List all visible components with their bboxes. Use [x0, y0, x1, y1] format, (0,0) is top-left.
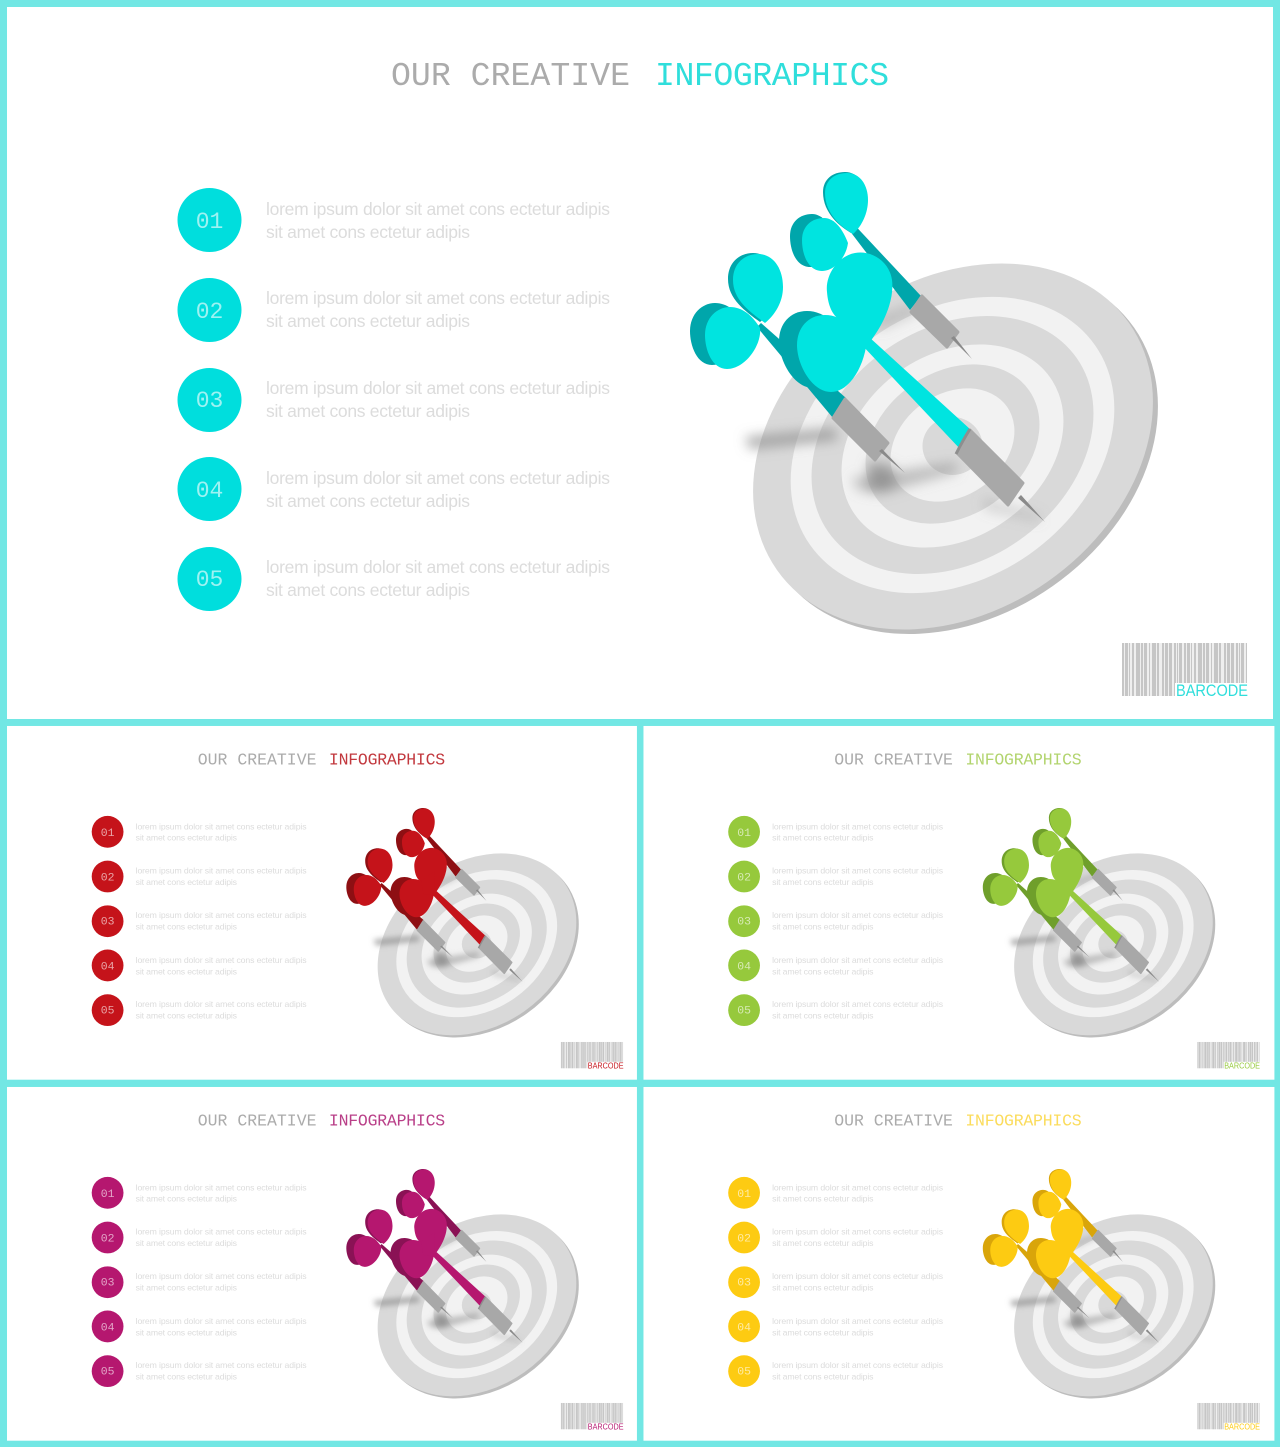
title: INFOGRAPHICS: [965, 751, 1082, 770]
illustration: dartboard with three darts: [979, 1169, 1250, 1436]
list item 05: [178, 547, 610, 611]
list item 02: sit amet cons ectetur adipis: [772, 1238, 874, 1248]
barcode: [561, 1403, 624, 1431]
title: OUR CREATIVE: [834, 1112, 953, 1131]
list item 04: sit amet cons ectetur adipis: [136, 1327, 238, 1337]
list item 04: lorem ipsum dolor sit amet cons ectetur adipis: [772, 1316, 944, 1326]
list item 01: lorem ipsum dolor sit amet cons ectetur adipis: [772, 1182, 944, 1192]
list item 05: sit amet cons ectetur adipis: [772, 1372, 874, 1382]
barcode: BARCODE: [1176, 681, 1248, 700]
dart: left: [690, 253, 905, 473]
list item 01: 01: [737, 1188, 751, 1201]
list item 01: [92, 1177, 307, 1209]
list item 02: lorem ipsum dolor sit amet cons ectetur adipis: [772, 866, 944, 876]
list item 02: 02: [101, 871, 115, 884]
list item 05: sit amet cons ectetur adipis: [772, 1011, 874, 1021]
title: [834, 1112, 1082, 1131]
list item 01: sit amet cons ectetur adipis: [136, 833, 238, 843]
list item 02: lorem ipsum dolor sit amet cons ectetur adipis: [136, 1227, 307, 1237]
list item 02: 02: [101, 1232, 115, 1245]
list item 04: sit amet cons ectetur adipis: [266, 491, 470, 511]
list item 03: 03: [101, 1277, 115, 1290]
dart: back: [790, 172, 972, 359]
list item 03: [92, 905, 307, 937]
title: INFOGRAPHICS: [329, 1112, 445, 1131]
list item 05: lorem ipsum dolor sit amet cons ectetur adipis: [136, 1360, 307, 1370]
list item 03: sit amet cons ectetur adipis: [772, 922, 874, 932]
list item 01: sit amet cons ectetur adipis: [772, 833, 874, 843]
barcode: [561, 1042, 624, 1070]
list item 03: sit amet cons ectetur adipis: [136, 1283, 238, 1293]
list item 02: [728, 1222, 944, 1253]
barcode: [1197, 1042, 1261, 1070]
list item 04: lorem ipsum dolor sit amet cons ectetur adipis: [136, 955, 307, 965]
list item 03: lorem ipsum dolor sit amet cons ectetur adipis: [136, 1271, 307, 1281]
list item 01: lorem ipsum dolor sit amet cons ectetur adipis: [136, 1182, 307, 1192]
list item 01: lorem ipsum dolor sit amet cons ectetur adipis: [266, 199, 610, 219]
list item 05: lorem ipsum dolor sit amet cons ectetur adipis: [772, 1360, 944, 1370]
list item 01: 01: [737, 827, 751, 840]
list item 02: [728, 861, 944, 892]
list item 02: lorem ipsum dolor sit amet cons ectetur adipis: [266, 288, 610, 308]
list item 03: lorem ipsum dolor sit amet cons ectetur adipis: [266, 378, 610, 398]
title: OUR CREATIVE: [834, 751, 953, 770]
list item 01: [178, 188, 610, 252]
list item 05: lorem ipsum dolor sit amet cons ectetur adipis: [266, 557, 610, 577]
list item 01: sit amet cons ectetur adipis: [266, 222, 470, 242]
list item 05: [92, 1355, 307, 1387]
list item 03: [728, 905, 944, 937]
barcode: [1197, 1403, 1261, 1431]
list item 01: 01: [196, 209, 223, 235]
list item 05: sit amet cons ectetur adipis: [136, 1372, 238, 1382]
list item 02: [92, 861, 307, 892]
list item 04: 04: [737, 1321, 751, 1334]
panel: green: [643, 726, 1274, 1080]
barcode: BARCODE: [588, 1060, 624, 1070]
list item 04: lorem ipsum dolor sit amet cons ectetur adipis: [266, 468, 610, 488]
list item 05: 05: [101, 1366, 115, 1379]
list item 01: [728, 816, 944, 848]
title: [198, 751, 445, 770]
list item 02: sit amet cons ectetur adipis: [266, 311, 470, 331]
list item 04: sit amet cons ectetur adipis: [136, 966, 238, 976]
list item 02: 02: [737, 1232, 751, 1245]
list item 05: 05: [737, 1005, 751, 1018]
list item 04: [728, 1311, 944, 1342]
list item 04: [92, 950, 307, 981]
list item 02: [178, 278, 610, 342]
list item 04: [92, 1311, 307, 1342]
barcode: [1122, 643, 1249, 700]
list item 05: 05: [737, 1366, 751, 1379]
panel: magenta: [7, 1087, 637, 1441]
list item 01: sit amet cons ectetur adipis: [772, 1194, 874, 1204]
list item 04: 04: [101, 1321, 115, 1334]
illustration: dartboard with three darts: [342, 1169, 614, 1436]
list item 04: sit amet cons ectetur adipis: [772, 1327, 874, 1337]
list item 02: 02: [196, 299, 223, 325]
list item 05: [728, 994, 944, 1026]
list item 03: lorem ipsum dolor sit amet cons ectetur adipis: [136, 910, 307, 920]
list item 03: 03: [196, 388, 223, 414]
list item 02: lorem ipsum dolor sit amet cons ectetur adipis: [136, 866, 307, 876]
barcode: BARCODE: [1224, 1421, 1260, 1431]
list item 03: [728, 1266, 944, 1298]
illustration: dartboard with three darts: [682, 172, 1229, 709]
title: [198, 1112, 445, 1131]
list item 04: lorem ipsum dolor sit amet cons ectetur adipis: [772, 955, 944, 965]
title: [834, 751, 1082, 770]
list item 05: sit amet cons ectetur adipis: [266, 580, 470, 600]
list item 02: sit amet cons ectetur adipis: [136, 1238, 238, 1248]
list item 01: [92, 816, 307, 848]
list item 05: 05: [196, 567, 223, 593]
list item 01: 01: [101, 1188, 115, 1201]
list item 01: [728, 1177, 944, 1209]
list item 04: [178, 457, 610, 521]
list item 03: sit amet cons ectetur adipis: [772, 1283, 874, 1293]
list item 05: lorem ipsum dolor sit amet cons ectetur adipis: [772, 999, 944, 1009]
dart: centre in bullseye: [779, 252, 1045, 522]
list item 05: sit amet cons ectetur adipis: [136, 1011, 238, 1021]
title: [391, 57, 889, 95]
list item 03: sit amet cons ectetur adipis: [136, 922, 238, 932]
list item 05: lorem ipsum dolor sit amet cons ectetur adipis: [136, 999, 307, 1009]
panel: yellow: [643, 1087, 1274, 1441]
list item 04: lorem ipsum dolor sit amet cons ectetur adipis: [136, 1316, 307, 1326]
title: OUR CREATIVE: [198, 751, 317, 770]
barcode: BARCODE: [1224, 1060, 1260, 1070]
list item 05: [728, 1355, 944, 1387]
list item 02: lorem ipsum dolor sit amet cons ectetur adipis: [772, 1227, 944, 1237]
list item 02: 02: [737, 871, 751, 884]
list item 04: 04: [196, 478, 223, 504]
list item 04: [728, 950, 944, 981]
title: INFOGRAPHICS: [329, 751, 445, 770]
list item 03: [178, 368, 610, 432]
list item 03: 03: [101, 916, 115, 929]
list item 04: 04: [101, 960, 115, 973]
panel: red: [7, 726, 637, 1080]
illustration: dartboard with three darts: [979, 808, 1250, 1075]
list item 04: 04: [737, 960, 751, 973]
list item 04: sit amet cons ectetur adipis: [772, 966, 874, 976]
list item 01: lorem ipsum dolor sit amet cons ectetur adipis: [772, 821, 944, 831]
title: OUR CREATIVE: [391, 57, 630, 95]
title: INFOGRAPHICS: [655, 57, 889, 95]
list item 02: [92, 1222, 307, 1253]
list item 03: 03: [737, 1277, 751, 1290]
list item 05: 05: [101, 1005, 115, 1018]
list item 03: lorem ipsum dolor sit amet cons ectetur adipis: [772, 910, 944, 920]
list item 02: sit amet cons ectetur adipis: [136, 877, 238, 887]
list item 01: sit amet cons ectetur adipis: [136, 1194, 238, 1204]
list item 05: [92, 994, 307, 1026]
list item 03: sit amet cons ectetur adipis: [266, 401, 470, 421]
panel: main cyan: [7, 7, 1273, 719]
list item 03: [92, 1266, 307, 1298]
illustration: dartboard with three darts: [342, 808, 614, 1075]
dartboard: [682, 188, 1229, 709]
title: INFOGRAPHICS: [965, 1112, 1082, 1131]
list item 02: sit amet cons ectetur adipis: [772, 877, 874, 887]
list item 03: lorem ipsum dolor sit amet cons ectetur adipis: [772, 1271, 944, 1281]
list item 01: lorem ipsum dolor sit amet cons ectetur adipis: [136, 821, 307, 831]
barcode: BARCODE: [588, 1421, 624, 1431]
list item 01: 01: [101, 827, 115, 840]
dart shadows: [745, 303, 1040, 522]
title: OUR CREATIVE: [198, 1112, 317, 1131]
list item 03: 03: [737, 916, 751, 929]
